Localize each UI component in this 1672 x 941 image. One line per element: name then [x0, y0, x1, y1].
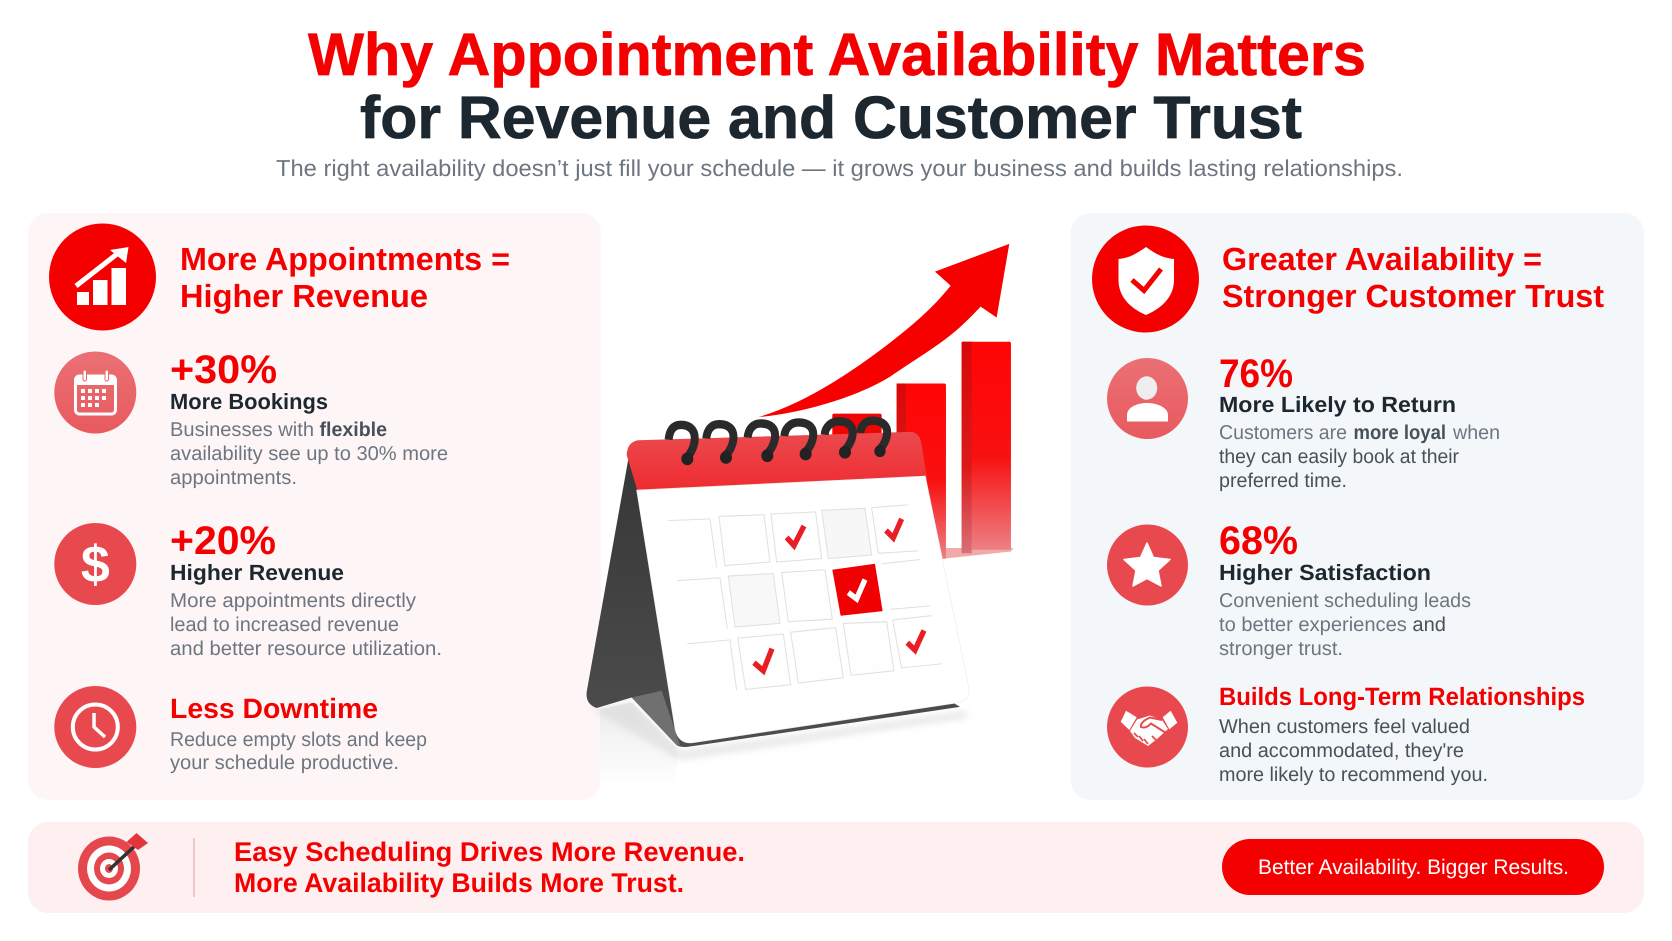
banner message: More Availability Builds More Trust.: [234, 868, 684, 898]
panel heading: Higher Revenue: [180, 278, 428, 314]
stat: more likely to return: Customers are: [1219, 422, 1347, 444]
stat: long-term relationships: Builds Long-Term Relationships: [1219, 683, 1585, 711]
bottom banner: [28, 822, 1644, 913]
stat: higher satisfaction: Convenient scheduling leads: [1219, 590, 1471, 612]
panel heading: More Appointments =: [180, 241, 510, 277]
subtitle: The right availability doesn’t just fill your schedule — it grows your business and builds lasting relationships.: [276, 155, 1403, 181]
stat: less downtime: Reduce empty slots and keep: [170, 729, 427, 751]
title: for Revenue and Customer Trust: [360, 84, 1302, 151]
stat: more likely to return: they can easily book at their: [1219, 446, 1459, 468]
icon: person: [1107, 358, 1188, 439]
stat: higher satisfaction: [1219, 519, 1471, 660]
icon: clock: [54, 686, 136, 768]
pill button: Better Availability. Bigger Results.: [1258, 856, 1569, 879]
stat: more bookings: [170, 348, 448, 489]
stat: more likely to return: preferred time.: [1219, 470, 1347, 492]
stat: long-term relationships: more likely to recommend you.: [1219, 764, 1488, 786]
calendar page: [637, 476, 969, 743]
icon: dollar: $: [81, 536, 110, 594]
growth arrow: [758, 244, 1009, 417]
banner message: [234, 837, 745, 898]
stat: more bookings: Businesses with: [170, 419, 314, 441]
stat: more likely to return: when: [1452, 422, 1500, 444]
stat: long-term relationships: and accommodated, they're: [1219, 740, 1464, 762]
stat: higher revenue: and better resource utilization.: [170, 638, 442, 660]
floor shadow: [590, 701, 967, 760]
icon: calendar: [54, 352, 136, 434]
highlighted day: [832, 564, 883, 616]
divider: [194, 838, 195, 897]
stat: higher satisfaction: stronger trust.: [1219, 638, 1343, 660]
panel: more appointments, higher revenue: [28, 213, 601, 800]
title: [308, 21, 1366, 151]
icon: dollar: [54, 523, 136, 605]
calendar grid: [668, 505, 942, 690]
panel heading: [1222, 241, 1604, 314]
stat: higher satisfaction: to better experiences and: [1219, 614, 1446, 636]
stat: more bookings: More Bookings: [170, 389, 328, 414]
stat: more bookings: availability see up to 30% more: [170, 443, 448, 465]
stat: long-term relationships: When customers feel valued: [1219, 716, 1470, 738]
stat: more likely to return: [1219, 352, 1500, 492]
stat: more likely to return: 76%: [1219, 352, 1293, 396]
check marks: [754, 519, 924, 671]
binder rings: [669, 421, 887, 457]
stat: more bookings: +30%: [170, 348, 277, 392]
icon: star: [1107, 524, 1188, 606]
calendar stand: [587, 450, 960, 747]
icon: rising bar chart: [49, 224, 156, 330]
stat: higher revenue: More appointments directly: [170, 590, 416, 612]
calendar header: [627, 432, 927, 494]
banner message: Easy Scheduling Drives More Revenue.: [234, 837, 745, 867]
panel: greater availability, stronger trust: [1070, 213, 1644, 800]
illustration: calendar with growth chart: [587, 244, 1013, 788]
floor reflection: [600, 702, 677, 788]
stat: higher revenue: +20%: [170, 519, 276, 563]
stat: more likely to return: More Likely to Return: [1219, 392, 1456, 417]
stand inner flap: [632, 691, 680, 745]
title: Why Appointment Availability Matters: [308, 21, 1366, 88]
panel heading: [180, 241, 510, 314]
bar chart: [832, 342, 1013, 559]
stat: more bookings: flexible: [320, 419, 387, 441]
stat: less downtime: [170, 693, 427, 774]
stat: higher satisfaction: 68%: [1219, 519, 1298, 563]
panel heading: Stronger Customer Trust: [1222, 278, 1604, 314]
stat: more bookings: appointments.: [170, 467, 297, 489]
icon: shield: [1092, 226, 1199, 332]
stat: higher revenue: Higher Revenue: [170, 560, 344, 585]
stat: higher satisfaction: Higher Satisfaction: [1219, 560, 1431, 585]
icon: target with arrow: [78, 833, 148, 900]
stat: higher revenue: lead to increased revenue: [170, 614, 399, 636]
panel heading: Greater Availability =: [1222, 241, 1542, 277]
stat: higher revenue: [170, 519, 442, 660]
pill button: [1222, 839, 1604, 895]
stat: more likely to return: more loyal: [1354, 422, 1446, 444]
stat: long-term relationships: [1219, 683, 1585, 786]
stat: less downtime: Less Downtime: [170, 693, 378, 724]
icon: handshake: [1107, 686, 1188, 768]
stat: less downtime: your schedule productive.: [170, 752, 399, 774]
